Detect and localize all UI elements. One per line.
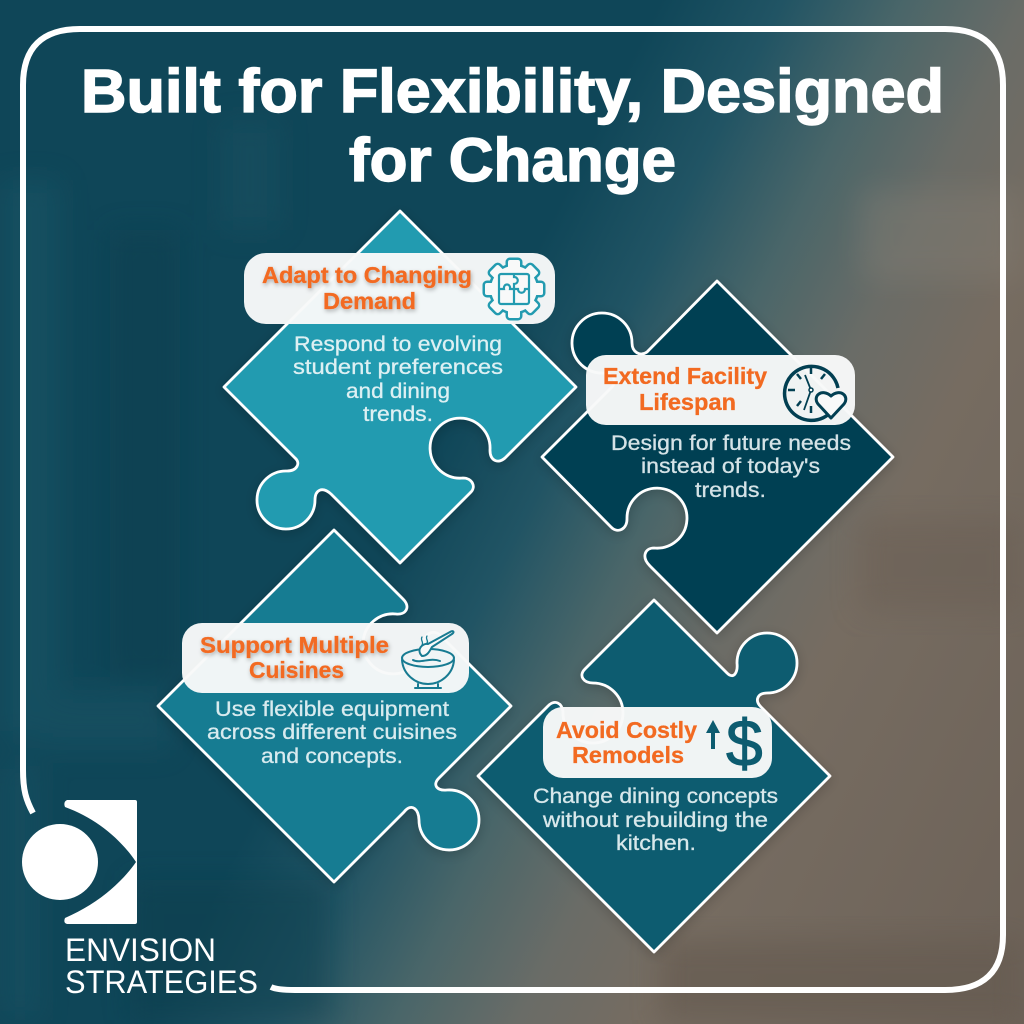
heading pill	[244, 253, 555, 324]
heading pill	[182, 623, 469, 693]
description: trends.	[695, 479, 766, 502]
description: trends.	[363, 403, 433, 426]
description: instead of today's	[641, 455, 820, 478]
puzzle piece 2	[542, 281, 893, 633]
heading pill: Demand	[323, 288, 416, 314]
heading pill: Adapt to Changing	[262, 262, 472, 288]
description: without rebuilding the	[542, 809, 768, 832]
heading pill: Support Multiple	[200, 632, 389, 658]
wordmark: ENVISION	[65, 932, 216, 968]
puzzle piece 4	[478, 600, 830, 952]
description	[207, 698, 457, 768]
puzzle piece 1	[224, 211, 576, 563]
icon: up arrow and dollar sign: $	[726, 706, 763, 780]
icon: eye mark	[22, 800, 137, 924]
description: student preferences	[293, 356, 503, 379]
title: for Change	[349, 126, 676, 194]
description: across different cuisines	[207, 721, 457, 744]
heading pill: Lifespan	[639, 389, 736, 415]
heading pill	[586, 355, 855, 425]
description: Change dining concepts	[533, 785, 778, 808]
icon: gear with puzzle	[485, 260, 543, 318]
icon: clock with heart	[785, 366, 846, 420]
title	[81, 57, 944, 194]
description: Design for future needs	[611, 432, 851, 455]
description	[293, 333, 503, 426]
logo: envision strategies	[22, 800, 258, 1000]
puzzle piece 3	[158, 530, 511, 882]
description	[533, 785, 778, 855]
heading pill: Avoid Costly	[556, 717, 697, 743]
panel: adapt to changing demand	[224, 211, 576, 563]
wordmark	[65, 932, 258, 1000]
wordmark: STRATEGIES	[65, 964, 258, 1000]
panel: avoid costly remodels	[478, 600, 830, 952]
panel: extend facility lifespan	[542, 281, 893, 633]
heading pill	[543, 707, 772, 778]
title: Built for Flexibility, Designed	[81, 57, 944, 125]
description: and concepts.	[261, 745, 403, 768]
heading pill: Cuisines	[249, 657, 344, 683]
heading pill: Remodels	[572, 742, 684, 768]
heading pill: Extend Facility	[603, 363, 767, 389]
panel: support multiple cuisines	[158, 530, 511, 882]
description: and dining	[346, 380, 450, 403]
description	[611, 432, 851, 502]
description: kitchen.	[616, 832, 696, 855]
description: Use flexible equipment	[215, 698, 449, 721]
icon: up arrow and dollar sign	[706, 706, 763, 780]
icon: soup bowl with spoon	[402, 631, 454, 688]
description: Respond to evolving	[294, 333, 502, 356]
